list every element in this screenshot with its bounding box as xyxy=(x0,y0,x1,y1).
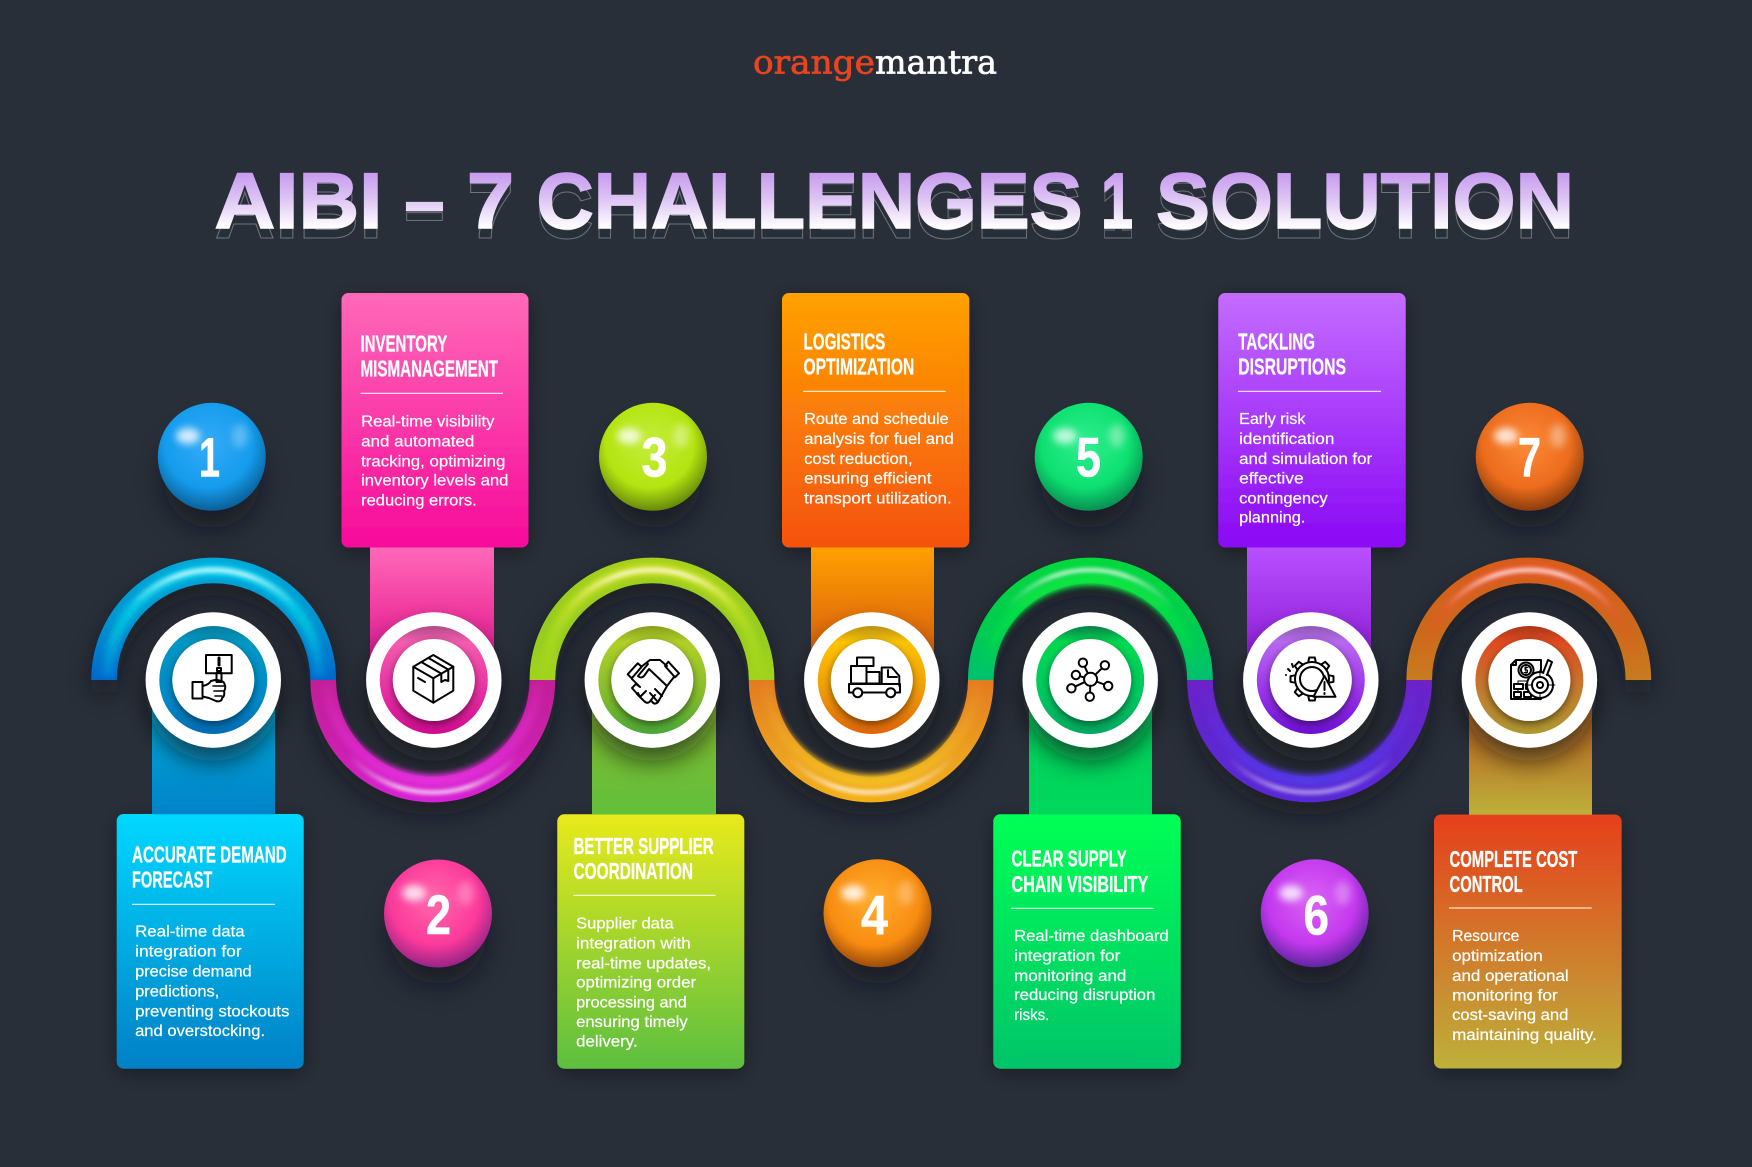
card 6 body text xyxy=(1239,411,1372,527)
card 1 body text: predictions, xyxy=(135,983,219,1000)
card 7 body text: cost-saving and xyxy=(1452,1007,1568,1024)
card 5 panel xyxy=(993,814,1181,1069)
card 1 body text: preventing stockouts xyxy=(135,1003,290,1020)
title: CHALLENGES xyxy=(536,166,1082,255)
card 7 body text: and operational xyxy=(1452,968,1569,985)
card 6 heading: DISRUPTIONS xyxy=(1238,354,1346,380)
card 7 panel xyxy=(1434,814,1622,1068)
card 6 body text: contingency xyxy=(1239,490,1328,507)
card 2 body text: reducing errors. xyxy=(361,492,477,509)
card 1 panel xyxy=(117,814,304,1069)
card 3 heading xyxy=(574,833,714,884)
node 2: icon box xyxy=(366,612,501,748)
card 6 body text: planning. xyxy=(1239,510,1305,527)
ball 4 xyxy=(824,859,932,984)
card 6 body text: effective xyxy=(1239,470,1304,487)
card 3 body text: optimizing order xyxy=(576,975,696,992)
pipe: wave segment 5 green xyxy=(981,570,1200,680)
node 7: icon cost document and target xyxy=(1462,612,1597,748)
ball 1 xyxy=(158,403,266,528)
title: – xyxy=(404,166,444,255)
card 4 body text: analysis for fuel and xyxy=(804,431,954,448)
ball 2: 2 xyxy=(426,883,451,946)
card 1 body text: precise demand xyxy=(135,964,252,981)
card 5 body text: Real-time dashboard xyxy=(1014,928,1169,945)
card 1 heading: ACCURATE DEMAND xyxy=(132,841,287,867)
card 5 heading: CHAIN VISIBILITY xyxy=(1012,871,1148,897)
pipe: wave segment 4 orange xyxy=(762,680,981,792)
card 1 body text: and overstocking. xyxy=(135,1023,265,1040)
card 2 body text: and automated xyxy=(361,434,474,451)
card 4 body text: transport utilization. xyxy=(804,490,952,507)
card 6: tackling disruptions xyxy=(1218,293,1406,548)
card 1: accurate demand forecast xyxy=(117,814,304,1069)
card 5 body text: reducing disruption xyxy=(1014,987,1155,1004)
card 7 body text: Resource xyxy=(1452,928,1519,945)
card 4 body text: cost reduction, xyxy=(804,451,913,468)
pipe: wave segment 6 violet xyxy=(1200,680,1419,792)
card 2 body text: inventory levels and xyxy=(361,473,508,490)
card 7 body text: monitoring for xyxy=(1452,987,1558,1004)
card 4 heading: LOGISTICS xyxy=(804,328,885,354)
title xyxy=(214,156,1574,255)
pipe shadow xyxy=(104,582,1638,802)
node 1: icon hand with sign xyxy=(146,612,281,748)
logo: orangemantra: orange xyxy=(753,42,875,82)
card 3 heading: COORDINATION xyxy=(574,858,693,884)
card 4 body text: ensuring efficient xyxy=(804,470,932,487)
card 3 body text: integration with xyxy=(576,935,691,952)
card 5 heading: CLEAR SUPPLY xyxy=(1012,846,1127,872)
card 1 heading xyxy=(132,841,287,893)
ball 2 xyxy=(384,860,492,984)
title: – xyxy=(404,156,444,245)
card 6 heading: TACKLING xyxy=(1238,328,1315,354)
card 4: logistics optimization xyxy=(782,293,969,548)
card 1 heading: FORECAST xyxy=(132,867,212,893)
card 7 heading: COMPLETE COST xyxy=(1450,846,1577,872)
card 7 heading xyxy=(1450,846,1577,897)
card 4 panel xyxy=(782,293,969,548)
card 2 heading xyxy=(360,331,498,382)
card 2: inventory mismanagement xyxy=(342,293,528,548)
card 6 body text: Early risk xyxy=(1239,411,1306,428)
card 2 body text: tracking, optimizing xyxy=(361,453,505,470)
card 6 body text: identification xyxy=(1239,431,1334,448)
ball 3 xyxy=(599,403,707,528)
card 3 body text: real-time updates, xyxy=(576,955,711,972)
card 3 body text: delivery. xyxy=(576,1033,638,1050)
title: 7 xyxy=(467,156,514,245)
card 2 body text: Real-time visibility xyxy=(361,414,495,431)
card 4 body text xyxy=(804,411,954,507)
card 2 panel xyxy=(342,293,528,548)
card 3 body text: Supplier data xyxy=(576,915,674,932)
pipe: wave segment 1 blue xyxy=(104,570,323,680)
card 5 body text xyxy=(1014,928,1169,1024)
card 7 body text: optimization xyxy=(1452,948,1543,965)
card 7 body text: maintaining quality. xyxy=(1452,1027,1597,1044)
card 2 heading: INVENTORY xyxy=(360,331,447,357)
logo: orangemantra xyxy=(753,42,997,82)
card 3 panel xyxy=(557,814,744,1069)
node 3: icon handshake xyxy=(585,612,720,748)
ball 7 xyxy=(1476,403,1584,528)
pipe: wave segment 7 rust xyxy=(1419,570,1638,680)
pipe: wave segment 3 lime xyxy=(542,570,762,680)
card 2 heading: MISMANAGEMENT xyxy=(360,356,498,382)
card 3 heading: BETTER SUPPLIER xyxy=(574,833,714,859)
title: SOLUTION xyxy=(1156,166,1574,255)
ball 3: 3 xyxy=(642,426,668,489)
ball 1: 1 xyxy=(199,426,220,489)
connector bands xyxy=(152,548,1592,815)
card 7 heading: CONTROL xyxy=(1450,871,1523,897)
node 6: icon gear warning xyxy=(1243,612,1379,748)
title: 1 xyxy=(1101,166,1133,255)
card 2 body text xyxy=(361,414,508,509)
card 5 body text: integration for xyxy=(1014,948,1120,965)
card 7 body text xyxy=(1452,928,1597,1044)
ball 4: 4 xyxy=(861,883,888,946)
card 4 heading: OPTIMIZATION xyxy=(804,354,914,380)
card 4 heading xyxy=(804,328,914,380)
ball 6: 6 xyxy=(1304,883,1329,946)
card 3 body text: ensuring timely xyxy=(576,1014,688,1031)
card 6 heading xyxy=(1238,328,1346,380)
title: AIBI xyxy=(214,156,382,245)
ball 6 xyxy=(1261,859,1369,984)
node 5: icon network xyxy=(1022,612,1158,748)
card 6 panel xyxy=(1218,293,1406,548)
card 7: complete cost control xyxy=(1434,814,1622,1068)
card 4 body text: Route and schedule xyxy=(804,411,949,428)
title: AIBI xyxy=(214,166,382,255)
card 5: clear supply chain visibility xyxy=(993,814,1181,1069)
card 6 body text: and simulation for xyxy=(1239,451,1372,468)
ball 5: 5 xyxy=(1076,426,1101,489)
card 1 body text: Real-time data xyxy=(135,924,245,941)
card 5 body text: risks. xyxy=(1014,1007,1049,1024)
card 1 body text xyxy=(135,924,290,1040)
card 1 body text: integration for xyxy=(135,944,242,961)
card 3: better supplier coordination xyxy=(557,814,744,1069)
title: CHALLENGES xyxy=(536,156,1082,245)
ball 7: 7 xyxy=(1518,426,1541,489)
title: SOLUTION xyxy=(1156,156,1574,245)
card 5 heading xyxy=(1012,846,1148,897)
ball 5 xyxy=(1035,403,1143,528)
card 3 body text xyxy=(576,915,711,1050)
title: 7 xyxy=(467,166,514,255)
title: 1 xyxy=(1101,156,1133,245)
card 5 body text: monitoring and xyxy=(1014,968,1126,985)
pipe: wave segment 2 magenta xyxy=(323,680,542,792)
logo: orangemantra: mantra xyxy=(875,42,997,82)
card 3 body text: processing and xyxy=(576,994,687,1011)
node 4: icon truck xyxy=(804,612,940,748)
